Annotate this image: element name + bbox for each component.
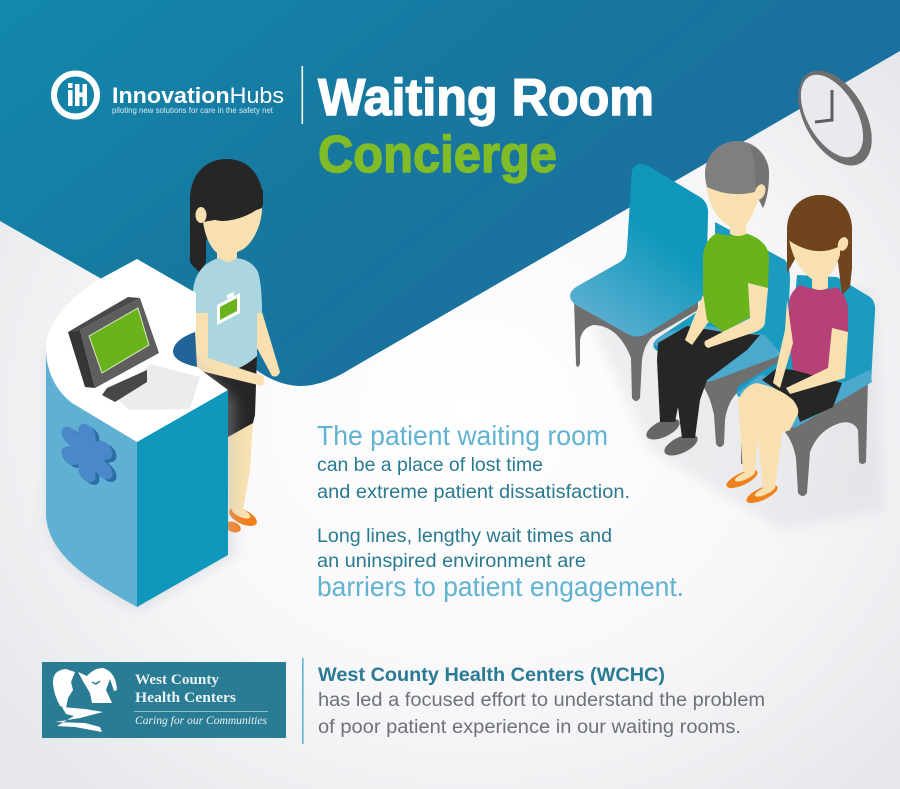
footer divider — [302, 658, 304, 744]
woman shoes — [724, 466, 780, 507]
floor shadow — [580, 290, 885, 530]
logo wordmark: InnovationHubs — [112, 83, 284, 108]
receptionist leg — [228, 420, 253, 510]
receptionist hair back — [190, 159, 263, 273]
logo icon — [54, 74, 97, 117]
woman left arm — [773, 300, 793, 388]
receptionist skirt — [197, 355, 257, 437]
chair 2 back and seat — [653, 222, 790, 382]
receptionist — [190, 159, 280, 534]
woman hair back — [787, 195, 852, 295]
woman patient — [724, 195, 852, 507]
monitor screen — [89, 308, 149, 373]
The patient waiting room: The patient waiting room — [317, 420, 608, 451]
desk right face — [137, 390, 228, 607]
monitor side — [68, 330, 95, 388]
header divider — [302, 66, 303, 124]
man trousers — [657, 326, 760, 438]
title: Concierge: Concierge — [318, 126, 557, 184]
monitor top edge — [68, 297, 140, 332]
waiting chairs and patients — [570, 141, 875, 507]
blue header shape — [0, 0, 900, 386]
logo tagline: Caring for our Communities — [135, 713, 267, 727]
footer heading: West County Health Centers (WCHC) — [318, 665, 665, 686]
shirt — [193, 258, 262, 374]
woman skirt — [762, 368, 842, 422]
chair 3 back and seat — [736, 275, 875, 428]
and extreme patient dissatisfaction: and extreme patient dissatisfaction. — [317, 482, 630, 503]
logo name line 2: Health Centers — [135, 690, 236, 706]
West County Health Centers logo — [42, 662, 286, 738]
left arm — [195, 313, 264, 386]
right arm — [250, 305, 280, 376]
man shirt — [703, 233, 769, 332]
chair 3 — [736, 275, 875, 496]
footer line 2: of poor patient experience in our waiting rooms. — [318, 717, 741, 738]
desk top — [46, 259, 228, 442]
logo: Innovation Hubs — [54, 74, 284, 117]
man patient — [643, 141, 769, 460]
computer monitor — [68, 297, 159, 402]
woman right arm — [786, 328, 848, 394]
man right arm — [704, 283, 768, 348]
medical star icon — [70, 426, 108, 483]
intro text block — [317, 420, 684, 602]
chair 1 back and seat — [570, 164, 708, 336]
desk notch — [173, 332, 197, 367]
an uninspired environment: an uninspired environment are — [317, 551, 586, 572]
logo tagline: piloting new solutions for care in the safety net — [112, 105, 274, 115]
woman legs — [738, 383, 798, 489]
woman hair front — [787, 195, 852, 251]
footer text — [318, 665, 765, 738]
title: Waiting Room: Waiting Room — [318, 69, 654, 127]
man hair — [705, 141, 769, 208]
chair 2 — [653, 222, 790, 447]
chair 2 legs — [700, 352, 782, 447]
man shoes — [643, 414, 701, 460]
monitor front — [80, 298, 159, 388]
man left arm — [685, 295, 712, 345]
logo name line 1: West County — [135, 672, 219, 688]
receptionist ear — [196, 207, 206, 223]
desk shadow — [46, 300, 235, 612]
chair 1 legs — [574, 290, 698, 401]
man ear — [753, 183, 767, 201]
monitor base — [102, 370, 147, 402]
chair 1 — [570, 164, 708, 401]
can be a place of lost time: can be a place of lost time — [317, 455, 543, 476]
man neck and face — [706, 185, 758, 236]
wall clock — [783, 58, 887, 178]
man hair shade — [750, 145, 769, 208]
woman ear — [836, 236, 850, 252]
receptionist neck and face — [203, 208, 262, 265]
footer line 1: has led a focused effort to understand the problem — [318, 690, 765, 711]
desk paper — [118, 364, 200, 410]
chair 3 legs — [785, 378, 868, 496]
desk left face — [46, 350, 137, 607]
reception desk — [46, 259, 235, 612]
logo heart with trees and river — [53, 668, 117, 732]
barriers to patient engagement: barriers to patient engagement. — [317, 571, 684, 602]
woman neck and face — [789, 240, 840, 290]
receptionist fringe — [204, 190, 263, 221]
woman shirt — [789, 285, 848, 385]
Long lines: Long lines, lengthy wait times and — [317, 526, 612, 547]
name badge — [217, 292, 240, 325]
receptionist shoes — [224, 504, 260, 534]
